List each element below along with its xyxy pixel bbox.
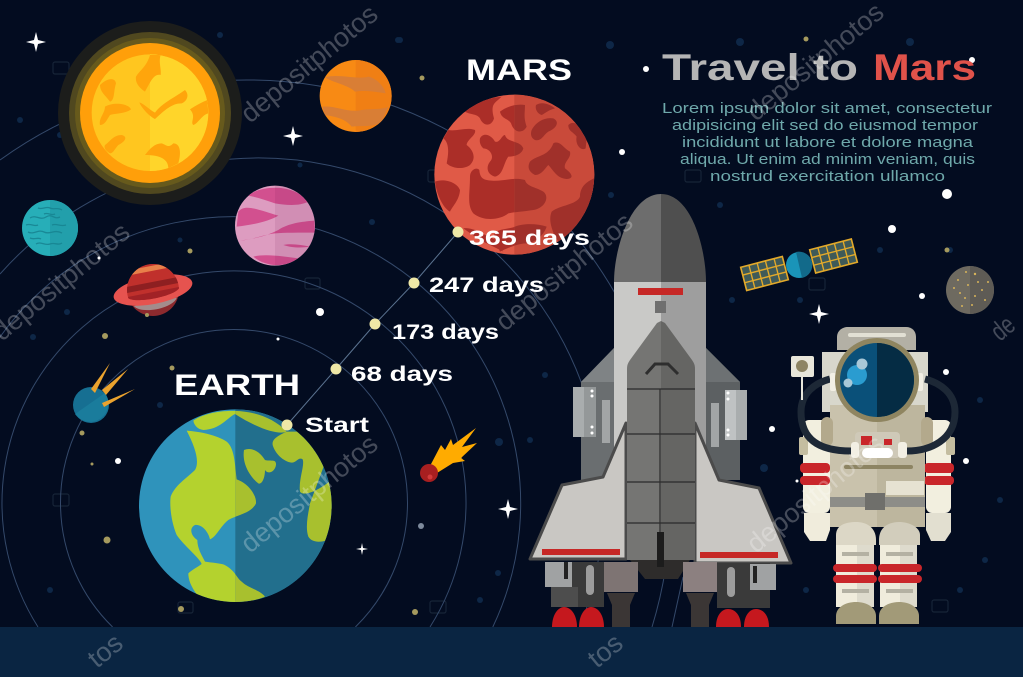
- solar orbits: [0, 80, 683, 627]
- antenna: [791, 356, 814, 400]
- sun: [58, 21, 242, 205]
- right engines: [683, 562, 776, 627]
- title: Travel to: [662, 47, 858, 88]
- mars surface: [435, 97, 594, 252]
- body text: [662, 100, 992, 185]
- small dots: [98, 57, 975, 482]
- tan dots: [80, 36, 950, 615]
- label: 365 days: 365 days: [469, 227, 590, 250]
- satellite: [741, 239, 857, 291]
- sparkle stars: [26, 32, 829, 555]
- torso: [822, 352, 928, 412]
- label: 68 days: 68 days: [351, 363, 453, 386]
- watermarks: tos: [82, 628, 129, 674]
- body text: incididunt ut labore et dolore magna: [682, 134, 974, 151]
- watermarks: depositphotos: [235, 429, 383, 559]
- body text: adipisicing elit sed do eiusmod tempor: [672, 117, 978, 134]
- earth: [139, 409, 337, 603]
- astronaut: [791, 327, 955, 624]
- title: Mars: [873, 47, 976, 88]
- planet: pink: [235, 186, 315, 266]
- legs: [833, 522, 922, 624]
- body text: nostrud exercitation ullamco: [710, 168, 945, 185]
- camera marks: [53, 62, 948, 613]
- watermarks: depositphotos: [741, 429, 889, 559]
- label: Earth: EARTH: [174, 369, 300, 402]
- lower body: [123, 260, 183, 320]
- boosters: [573, 348, 747, 480]
- left engines: [545, 562, 638, 627]
- ring: [111, 269, 195, 311]
- planet: blue with comet trails: [73, 363, 135, 423]
- label: 173 days: 173 days: [392, 321, 499, 344]
- hoses: [801, 379, 955, 451]
- label: 247 days: 247 days: [429, 274, 544, 297]
- wings: [530, 423, 626, 559]
- mars: [434, 95, 594, 255]
- planet: ringed: [114, 264, 192, 316]
- arms: [799, 420, 955, 541]
- watermarks: depositphotos: [741, 0, 889, 127]
- orbiter body: [627, 321, 661, 560]
- watermarks: tos: [582, 628, 629, 674]
- rocket: [530, 194, 791, 627]
- planet: grey speckled: [946, 266, 994, 314]
- fuselage: [614, 282, 661, 452]
- label: Start: Start: [305, 414, 369, 437]
- nose: [614, 194, 661, 282]
- trails: [91, 363, 135, 407]
- helmet: [835, 338, 919, 422]
- planet: orange: [320, 60, 392, 132]
- comet: [420, 428, 477, 482]
- watermarks: depositphotos: [490, 207, 638, 337]
- upper body: [127, 264, 179, 300]
- body text: Lorem ipsum dolor sit amet, consectetur: [662, 100, 992, 117]
- label: Mars: MARS: [466, 54, 572, 87]
- planet: teal: [22, 200, 78, 256]
- chest control: [855, 432, 900, 458]
- title: [662, 47, 976, 88]
- continents: [170, 411, 337, 603]
- watermarks: depositphotos: [235, 0, 383, 129]
- backpack: [837, 327, 916, 350]
- journey route: [282, 226, 464, 430]
- ground: [0, 627, 1023, 677]
- sun surface: [92, 54, 208, 171]
- body text: aliqua. Ut enim ad minim veniam, quis: [680, 151, 975, 168]
